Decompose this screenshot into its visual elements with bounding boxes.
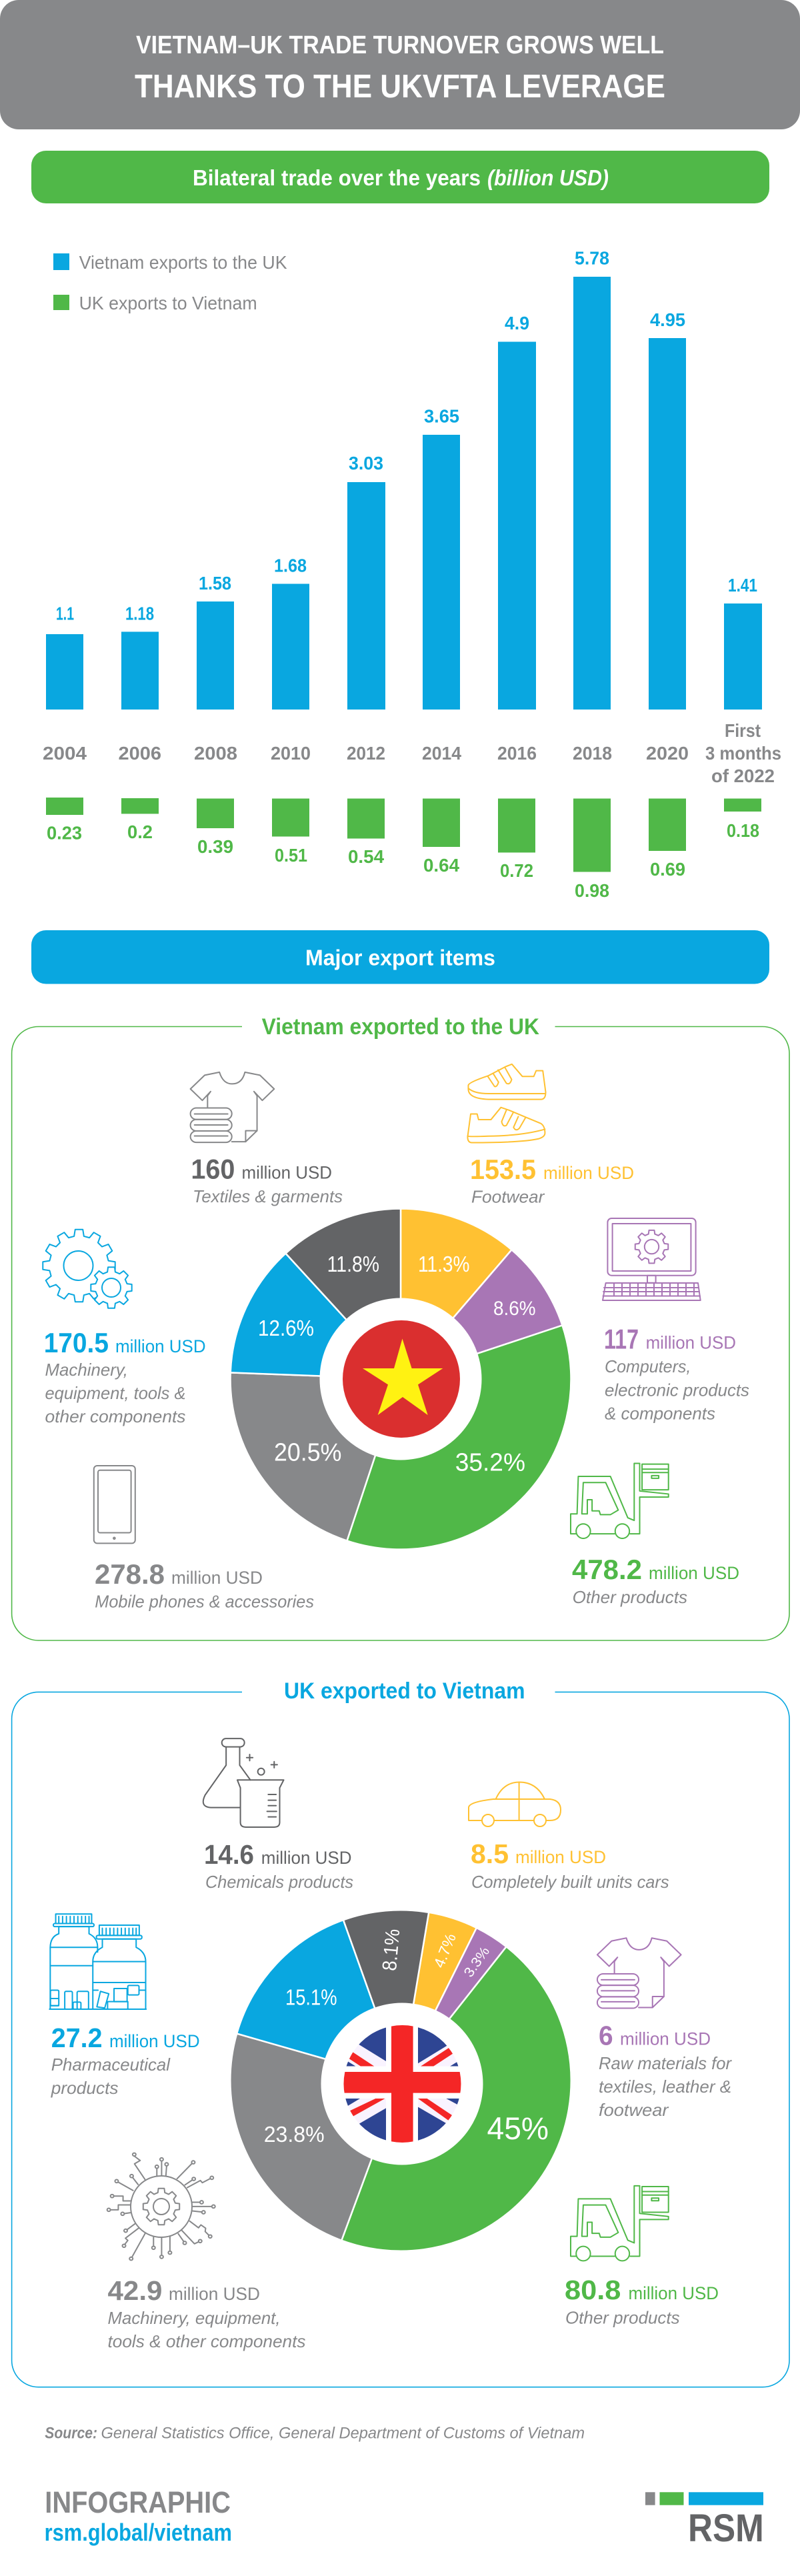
bar: 2012 — [347, 453, 385, 710]
icon: forklift — [571, 2186, 669, 2261]
bar chart: UK exports to Vietnam — [46, 798, 761, 901]
item: textiles and garments: million USD — [241, 1162, 332, 1182]
chart legend: UK exports to Vietnam — [79, 293, 257, 313]
icon: car — [469, 1782, 561, 1826]
year axis labels: 2016 — [497, 743, 537, 764]
item: machinery and components: tools & other components — [108, 2331, 306, 2351]
donut chart: Vietnam exports: 12.6% — [258, 1316, 314, 1340]
bar: 2012: 3.03 — [349, 453, 383, 473]
item: computers: Computers, — [605, 1356, 691, 1376]
item: mobile phones — [94, 1466, 314, 1612]
bar: 2006 — [121, 798, 159, 842]
bar: 2012: 0.54 — [348, 846, 384, 867]
item: raw materials: Raw materials for — [599, 2053, 732, 2073]
bar: 2010 — [272, 799, 309, 866]
bar: 2008: 1.58 — [199, 573, 231, 593]
bar: 2010: 0.51 — [275, 845, 307, 866]
item: other products — [571, 1464, 739, 1607]
bar: 2018: 0.98 — [575, 880, 609, 901]
item: mobile phones: million USD — [171, 1568, 263, 1588]
bar: 2016: 4.9 — [505, 313, 529, 333]
donut chart: UK exports: 45% — [487, 2111, 549, 2146]
item: pharmaceutical products: products — [51, 2078, 119, 2098]
item: textiles and garments: 160 — [191, 1153, 235, 1184]
item: chemicals — [203, 1738, 353, 1892]
year axis labels: 2010 — [271, 743, 311, 764]
item: footwear: million USD — [543, 1163, 634, 1183]
bar: 2014 — [423, 405, 460, 710]
year axis labels: First — [725, 720, 761, 741]
item: raw materials: footwear — [599, 2100, 669, 2120]
bar: 2010 — [272, 555, 309, 710]
item: computers: 117 — [604, 1323, 639, 1354]
bar: 2008: 0.39 — [197, 836, 233, 857]
title header panel — [0, 0, 800, 129]
item: machinery and components: million USD — [169, 2284, 260, 2304]
icon: circuit gear — [107, 2153, 215, 2260]
item: completely built unit cars: million USD — [515, 1847, 606, 1867]
bar: 2008 — [197, 573, 234, 710]
item: machinery: 170.5 — [44, 1327, 109, 1358]
item: other products: Other products — [565, 2308, 680, 2328]
source note: General Statistics Office, General Department of Customs of Vietnam — [101, 2425, 585, 2443]
icon: computer — [603, 1218, 701, 1300]
RSM logo — [645, 2492, 764, 2550]
bar: 2006 — [121, 603, 159, 710]
bar: 2014: 0.64 — [423, 855, 459, 876]
item: completely built unit cars — [469, 1782, 669, 1892]
item: computers: million USD — [646, 1332, 736, 1352]
footer label — [45, 2485, 232, 2546]
item: machinery: million USD — [115, 1336, 206, 1356]
item: textiles and garments: Textiles & garments — [193, 1186, 343, 1206]
year axis labels — [43, 720, 781, 786]
bar chart: Vietnam exports to the UK — [46, 247, 762, 710]
item: chemicals: 14.6 — [204, 1839, 254, 1870]
bar: 2016 — [498, 313, 536, 710]
donut chart: UK exports: 23.8% — [264, 2122, 325, 2147]
footer label: INFOGRAPHIC — [45, 2485, 231, 2519]
heading: bilateral trade — [31, 151, 769, 203]
panel heading: UK exported to Vietnam — [284, 1678, 525, 1704]
source note: Source: — [45, 2425, 97, 2443]
bar: 2020 — [649, 309, 686, 710]
heading: bilateral trade: (billion USD) — [487, 165, 609, 190]
icon: UK flag — [344, 2025, 461, 2143]
item: raw materials: textiles, leather & — [599, 2077, 731, 2097]
bar: 2012 — [347, 799, 385, 867]
panel: Vietnam exported to the UK — [12, 1014, 789, 1640]
bar: 2014: 3.65 — [424, 405, 459, 427]
icon: t-shirt — [191, 1072, 274, 1142]
year axis labels: 2020 — [646, 743, 689, 764]
icon: phone — [94, 1466, 135, 1543]
chart legend: Vietnam exports to the UK — [79, 252, 287, 273]
item: computers — [603, 1218, 749, 1423]
panel heading: Vietnam exported to the UK — [262, 1014, 539, 1040]
bar: 2006: 1.18 — [125, 603, 154, 624]
item: machinery and components: Machinery, equipment, — [108, 2308, 280, 2328]
item: pharmaceutical products: Pharmaceutical — [51, 2055, 171, 2075]
bar: 2010: 1.68 — [274, 555, 307, 576]
icon: forklift — [571, 1464, 669, 1538]
item: chemicals: Chemicals products — [205, 1872, 353, 1892]
item: textiles and garments — [191, 1072, 343, 1206]
RSM logo: RSM — [688, 2507, 764, 2550]
item: machinery: other components — [45, 1406, 185, 1426]
panel: UK exported to Vietnam — [12, 1678, 789, 2387]
item: machinery and components: 42.9 — [108, 2275, 163, 2306]
bar: first 3 months of 2022 — [724, 575, 762, 710]
bar: first 3 months of 2022: 0.18 — [727, 820, 759, 841]
year axis labels: 2018 — [573, 743, 612, 764]
item: machinery: Machinery, — [45, 1360, 128, 1380]
icon: t-shirt — [597, 1938, 681, 2009]
item: machinery: equipment, tools & — [45, 1383, 185, 1403]
item: chemicals: million USD — [261, 1848, 352, 1868]
donut chart: Vietnam exports: 35.2% — [455, 1449, 525, 1477]
item: mobile phones: 278.8 — [95, 1558, 165, 1590]
item: footwear — [467, 1064, 634, 1207]
item: raw materials: million USD — [620, 2029, 711, 2049]
item: other products: million USD — [649, 1563, 739, 1583]
bar: first 3 months of 2022 — [724, 799, 761, 841]
year axis labels: 3 months — [705, 743, 781, 764]
item: other products: 80.8 — [565, 2275, 621, 2305]
item: raw materials: 6 — [599, 2021, 613, 2051]
item: computers: electronic products — [605, 1380, 749, 1400]
item: computers: & components — [605, 1403, 715, 1423]
icon: gears — [43, 1230, 132, 1308]
item: machinery — [43, 1230, 206, 1426]
item: other products: Other products — [573, 1587, 687, 1607]
item: mobile phones: Mobile phones & accessories — [95, 1592, 314, 1612]
donut chart: Vietnam exports — [231, 1208, 571, 1550]
bar: first 3 months of 2022: 1.41 — [728, 575, 757, 595]
chart legend — [53, 252, 287, 313]
bar: 2018: 5.78 — [575, 247, 609, 268]
donut chart: UK exports: 15.1% — [285, 1985, 337, 2009]
item: footwear: 153.5 — [470, 1154, 536, 1185]
heading: major export items: Major export items — [305, 946, 495, 970]
bar: 2016: 0.72 — [500, 860, 533, 881]
item: machinery and components — [107, 2153, 306, 2351]
item: pharmaceutical products: 27.2 — [51, 2023, 103, 2053]
bar: 2004 — [46, 603, 83, 710]
donut chart: UK exports: 8.1% — [379, 1928, 404, 1972]
year axis labels: 2008 — [194, 743, 237, 764]
bar: 2020: 4.95 — [650, 309, 685, 330]
donut chart: Vietnam exports: 20.5% — [274, 1439, 341, 1467]
bar: 2004: 1.1 — [56, 603, 74, 624]
item: pharmaceutical products — [49, 1914, 200, 2098]
icon: shoes — [467, 1064, 545, 1143]
heading: major export items — [31, 930, 769, 984]
donut chart: UK exports: 3.3% — [461, 1944, 493, 1980]
year axis labels: 2004 — [43, 743, 87, 764]
item: raw materials — [597, 1938, 732, 2120]
bar: 2008 — [197, 799, 234, 857]
bar: 2016 — [498, 799, 535, 881]
bar: 2020: 0.69 — [650, 859, 685, 880]
bar: 2020 — [649, 799, 686, 880]
bar: 2004: 0.23 — [47, 823, 82, 844]
donut chart: UK exports — [230, 1910, 571, 2251]
donut chart: Vietnam exports: 11.8% — [327, 1252, 379, 1276]
item: other products: 478.2 — [572, 1554, 642, 1585]
bar: 2018 — [573, 799, 611, 901]
bar: 2018 — [573, 247, 611, 710]
item: other products — [565, 2186, 719, 2328]
year axis labels: of 2022 — [711, 766, 775, 786]
item: pharmaceutical products: million USD — [109, 2031, 200, 2051]
donut chart: UK exports: 4.7% — [430, 1931, 459, 1970]
icon: flask and beaker — [203, 1738, 284, 1827]
icon: Vietnam flag — [343, 1320, 460, 1438]
donut chart: Vietnam exports: 8.6% — [493, 1298, 536, 1320]
item: completely built unit cars: Completely built units cars — [471, 1872, 669, 1892]
item: completely built unit cars: 8.5 — [471, 1838, 509, 1869]
year axis labels: 2006 — [119, 743, 161, 764]
footer label: rsm.global/vietnam — [45, 2519, 232, 2546]
item: other products: million USD — [628, 2283, 719, 2303]
heading: bilateral trade: Bilateral trade over the years — [193, 165, 481, 190]
title header panel: VIETNAM–UK TRADE TURNOVER GROWS WELL — [136, 31, 664, 59]
title header panel: THANKS TO THE UKVFTA LEVERAGE — [135, 69, 665, 105]
bar: 2004 — [46, 798, 83, 844]
year axis labels: 2012 — [347, 743, 385, 764]
item: footwear: Footwear — [471, 1187, 545, 1207]
donut chart: Vietnam exports: 11.3% — [418, 1252, 469, 1276]
bar: 2006: 0.2 — [127, 822, 153, 842]
icon: medicine bottles — [49, 1914, 146, 2009]
bar: 2014 — [423, 799, 460, 876]
year axis labels: 2014 — [422, 743, 461, 764]
